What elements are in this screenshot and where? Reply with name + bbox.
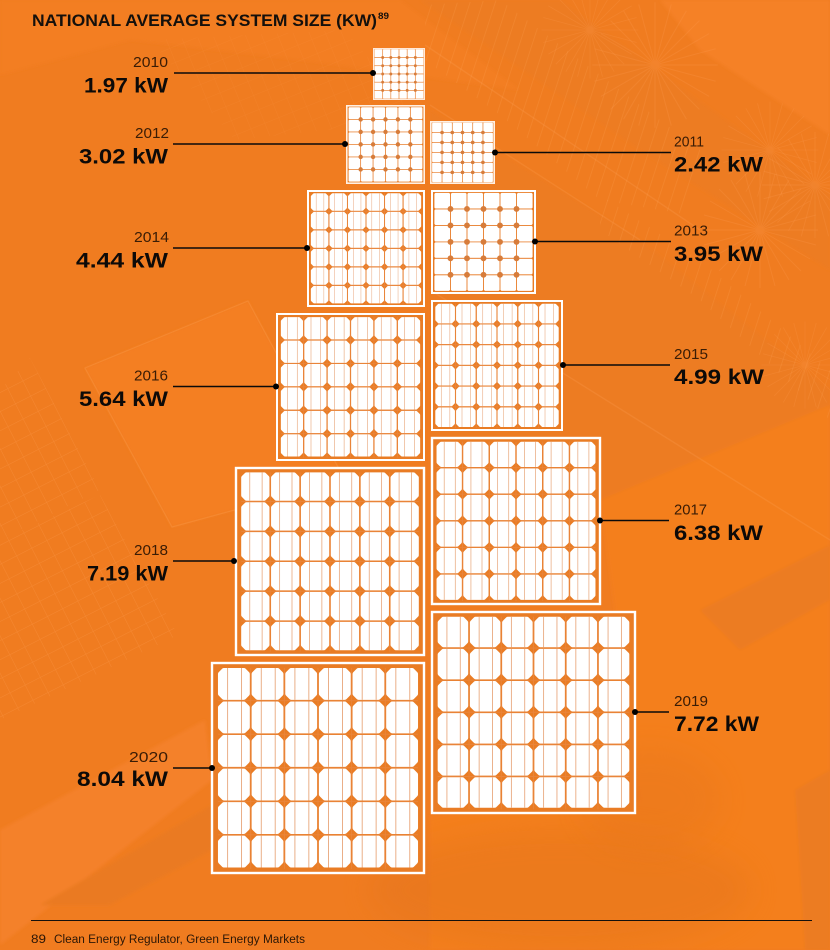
callout 2010 bbox=[84, 54, 376, 98]
footnote rule bbox=[31, 920, 812, 922]
callout 2019: 2019 bbox=[674, 693, 708, 710]
callout 2012: 3.02 kW bbox=[79, 146, 168, 168]
solar panel 2015 bbox=[432, 301, 562, 430]
callout 2020: 2020 bbox=[129, 749, 168, 766]
callout 2014 bbox=[76, 229, 310, 272]
callout 2019 bbox=[632, 693, 759, 736]
footnote source: 89 bbox=[31, 934, 46, 946]
callout 2015 bbox=[560, 346, 764, 389]
callout 2018 bbox=[87, 542, 237, 586]
callout 2017 bbox=[597, 502, 763, 545]
callout 2020: 8.04 kW bbox=[77, 768, 168, 791]
solar panel 2020 bbox=[212, 663, 424, 873]
callout 2017: 2017 bbox=[674, 502, 707, 518]
callout 2019: 7.72 kW bbox=[674, 713, 759, 736]
solar panel 2013 bbox=[432, 191, 535, 293]
callout 2018: 7.19 kW bbox=[87, 562, 168, 586]
title: 89 bbox=[378, 11, 389, 21]
callout 2011: 2.42 kW bbox=[674, 154, 763, 176]
footnote source: Clean Energy Regulator, Green Energy Markets bbox=[54, 934, 305, 946]
callout 2010: 2010 bbox=[133, 54, 168, 71]
callout 2016: 2016 bbox=[134, 368, 168, 384]
callout 2013: 3.95 kW bbox=[674, 243, 763, 266]
solar panel 2012 bbox=[347, 106, 424, 183]
callout 2012: 2012 bbox=[135, 125, 169, 142]
callout 2016 bbox=[79, 368, 279, 411]
callout 2015: 2015 bbox=[674, 346, 708, 363]
solar panel 2018 bbox=[236, 468, 424, 655]
callout 2017: 6.38 kW bbox=[674, 522, 763, 545]
callout 2014: 4.44 kW bbox=[76, 250, 168, 272]
callout 2020 bbox=[77, 749, 215, 791]
solar panel 2011 bbox=[431, 122, 494, 183]
callout 2011 bbox=[492, 134, 763, 176]
callout 2015: 4.99 kW bbox=[674, 366, 764, 389]
solar panel 2010 bbox=[374, 49, 424, 99]
callout 2013: 2013 bbox=[674, 222, 708, 240]
callout 2011: 2011 bbox=[674, 134, 704, 150]
title: NATIONAL AVERAGE SYSTEM SIZE (KW) bbox=[32, 12, 377, 30]
solar panel 2014 bbox=[308, 191, 424, 306]
callout 2010: 1.97 kW bbox=[84, 74, 168, 98]
solar panel 2016 bbox=[277, 314, 424, 460]
callout 2018: 2018 bbox=[134, 542, 168, 559]
solar panel 2019 bbox=[432, 612, 635, 813]
callout 2016: 5.64 kW bbox=[79, 388, 168, 411]
callout 2012 bbox=[79, 125, 348, 168]
solar panel 2017 bbox=[432, 438, 600, 604]
callout 2013 bbox=[532, 222, 763, 266]
callout 2014: 2014 bbox=[134, 229, 169, 246]
